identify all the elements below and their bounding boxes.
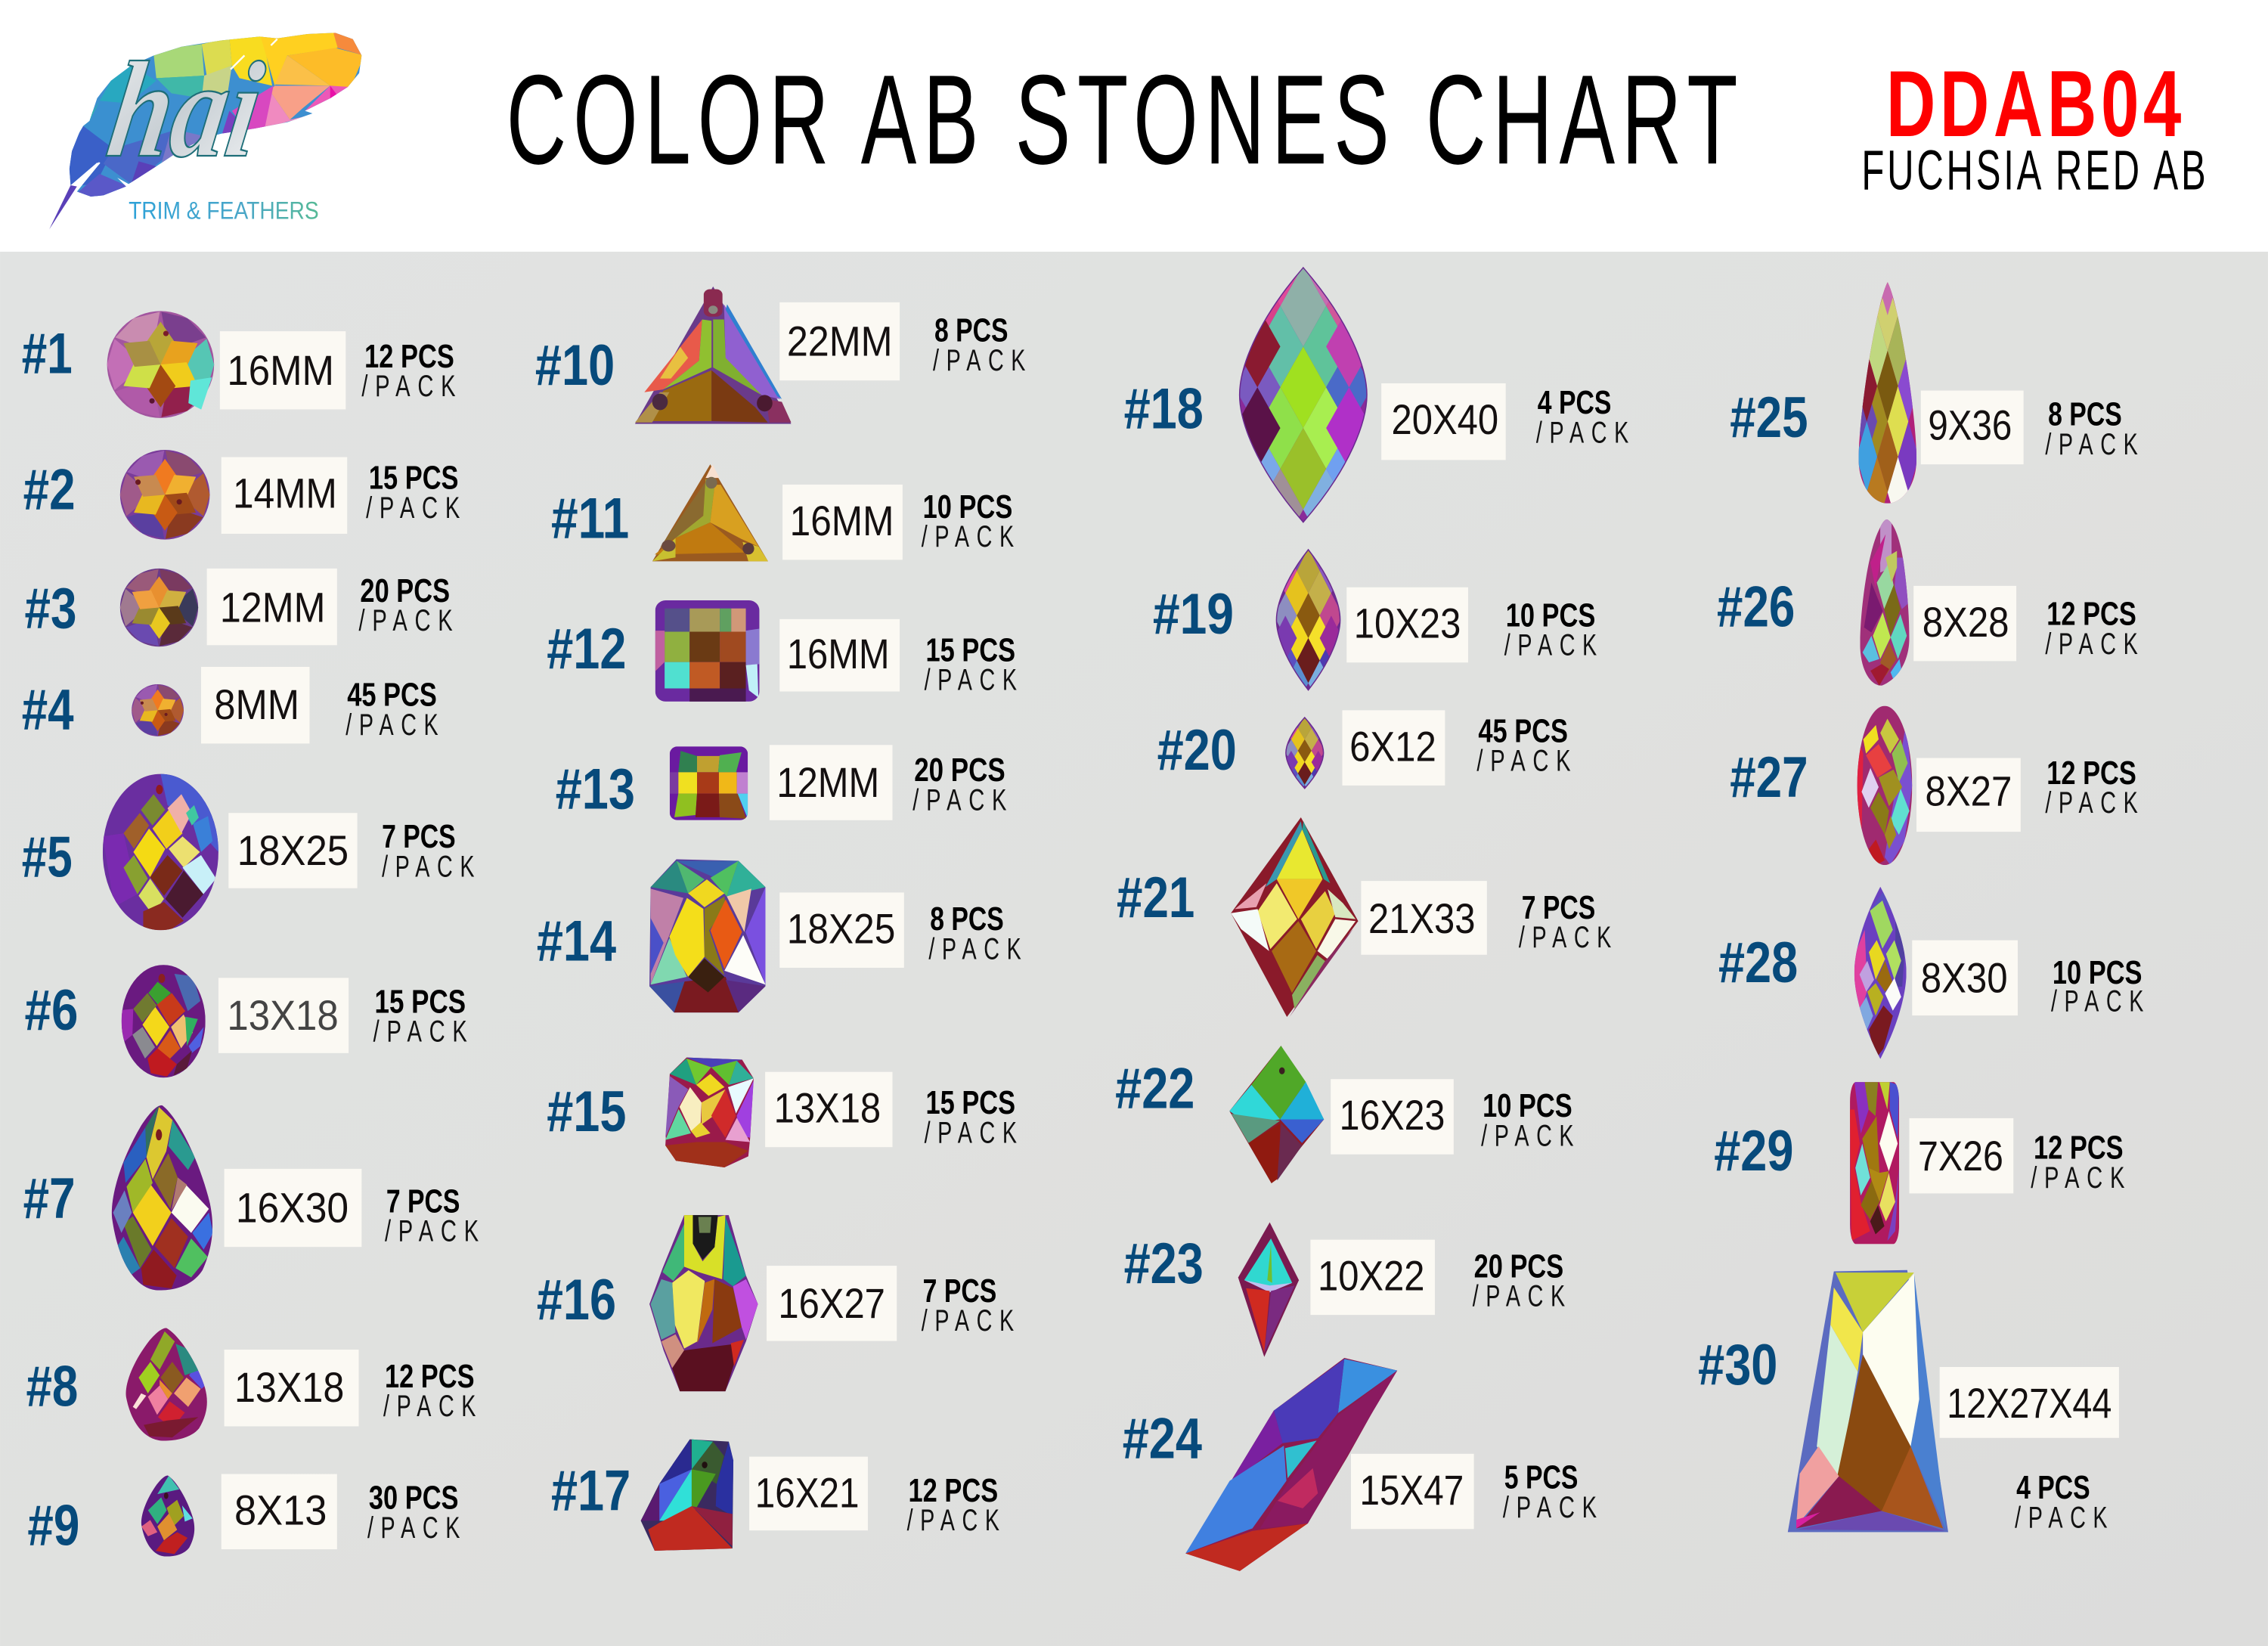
stone #13: #13 [556, 757, 635, 821]
stone #1: 16MM [227, 347, 334, 394]
stone #19: 10X23 [1354, 600, 1461, 647]
stone #19: 10 PCS [1506, 597, 1595, 634]
stone #3 [25, 564, 460, 651]
stone #12: #12 [547, 617, 626, 681]
stone #1 [22, 305, 463, 423]
stone #9: 8X13 [234, 1487, 327, 1534]
stone #23: #23 [1124, 1232, 1204, 1296]
stone #5: /PACK [382, 849, 482, 883]
stone #1: /PACK [361, 369, 463, 403]
stone #24: 15X47 [1359, 1467, 1464, 1514]
stone #15: 15 PCS [925, 1084, 1015, 1121]
stone #24 [1123, 1358, 1604, 1571]
stone #26: 8X28 [1923, 599, 2009, 646]
stone #30: #30 [1698, 1333, 1777, 1397]
stone #25: 8 PCS [2048, 395, 2122, 432]
stone #29: 12 PCS [2034, 1129, 2124, 1166]
stone #20: 45 PCS [1478, 712, 1568, 749]
stone #4: 8MM [214, 681, 299, 728]
stone #22: #22 [1115, 1057, 1194, 1121]
stone #23: /PACK [1473, 1279, 1572, 1313]
stone #25 [1730, 244, 2145, 528]
stone #23: 10X22 [1318, 1253, 1425, 1300]
stone #23 [1124, 1223, 1572, 1357]
stone #11: 16MM [790, 498, 894, 544]
stone #11: /PACK [922, 519, 1021, 553]
stone #18: #18 [1124, 377, 1204, 441]
stone #15: #15 [547, 1080, 626, 1144]
stone #30: 12X27X44 [1947, 1380, 2112, 1427]
stone #26 [1717, 519, 2145, 686]
stone #23: 20 PCS [1474, 1248, 1563, 1285]
stone #29: 7X26 [1918, 1133, 2003, 1179]
stone #21: #21 [1117, 866, 1194, 930]
stone #18 [1124, 225, 1636, 550]
stone #9: #9 [27, 1493, 79, 1558]
stone #6: 15 PCS [375, 983, 466, 1020]
stone #14: 18X25 [787, 905, 895, 952]
stone #29: /PACK [2031, 1161, 2132, 1195]
stone #21: 7 PCS [1522, 889, 1595, 926]
stone #28: /PACK [2051, 984, 2151, 1018]
stone #8: 12 PCS [385, 1358, 475, 1395]
stone #27: #27 [1730, 746, 1808, 810]
stone #25: /PACK [2045, 427, 2145, 461]
stone #12 [547, 600, 1024, 702]
stone #3: #3 [25, 576, 76, 640]
stone #17 [551, 1440, 1007, 1551]
stone #2: 14MM [233, 470, 337, 517]
stone #7: /PACK [385, 1214, 486, 1248]
stone #25: 9X36 [1928, 402, 2012, 449]
stone #24: 5 PCS [1504, 1459, 1578, 1496]
stone #27: 12 PCS [2046, 755, 2136, 792]
stone #9 [27, 1474, 467, 1558]
stone #22 [1115, 1046, 1581, 1183]
stone #20: 6X12 [1349, 723, 1436, 770]
stone #22: 16X23 [1340, 1092, 1445, 1139]
stone #9: 30 PCS [369, 1479, 459, 1516]
stone #27: /PACK [2045, 786, 2145, 820]
stone #30: 4 PCS [2016, 1469, 2090, 1506]
stone #20: #20 [1157, 718, 1237, 783]
stone #1: #1 [22, 322, 73, 386]
stone #8: #8 [26, 1355, 78, 1419]
stone #26: /PACK [2045, 627, 2145, 661]
stone #21 [1117, 817, 1619, 1017]
stone #2: /PACK [366, 491, 467, 525]
stone #29: #29 [1714, 1119, 1793, 1183]
stone #6: 13X18 [227, 992, 339, 1039]
stone #9: /PACK [367, 1511, 467, 1545]
stone #20 [1157, 705, 1578, 796]
stone #19: #19 [1153, 582, 1234, 646]
stone #19 [1153, 525, 1604, 705]
stone #10: 8 PCS [934, 312, 1009, 349]
stone #3: /PACK [359, 603, 460, 637]
stone #5: 18X25 [237, 827, 349, 874]
stone #4 [22, 667, 445, 743]
stone #16: #16 [537, 1268, 616, 1332]
stone #19: /PACK [1504, 628, 1604, 662]
stone #15 [547, 1058, 1024, 1167]
stone #28 [1718, 887, 2151, 1059]
stone #5: #5 [22, 825, 73, 889]
stone #16: /PACK [922, 1303, 1021, 1338]
stone #15: /PACK [925, 1115, 1024, 1149]
stone #17: 16X21 [755, 1470, 859, 1517]
stone #7: 7 PCS [386, 1183, 460, 1220]
stone #1: 12 PCS [364, 338, 454, 375]
stone #21: /PACK [1519, 920, 1619, 954]
stone #21: 21X33 [1368, 895, 1476, 942]
stone #30: /PACK [2015, 1500, 2115, 1534]
stone #2: #2 [23, 457, 76, 522]
stone #7: #7 [23, 1167, 76, 1231]
stone #3: 20 PCS [360, 572, 450, 609]
stone #15: 13X18 [774, 1085, 881, 1132]
stone #26: #26 [1717, 575, 1795, 639]
stone #14: 8 PCS [930, 900, 1004, 938]
stone #2 [23, 445, 467, 544]
stone #6: /PACK [373, 1015, 475, 1049]
stone #29 [1714, 1082, 2132, 1244]
stone #10: /PACK [933, 343, 1033, 377]
stone #24: #24 [1123, 1407, 1202, 1471]
stone #16: 16X27 [778, 1280, 885, 1327]
stone #20: /PACK [1476, 744, 1578, 778]
stone #4: /PACK [345, 708, 445, 742]
stone #12: 16MM [787, 631, 890, 677]
logo: hai trim and feathers: TRIM & FEATHERS [129, 196, 319, 224]
stone #16 [537, 1215, 1021, 1391]
stone #5: 7 PCS [382, 818, 456, 855]
stone #11: 10 PCS [923, 488, 1012, 525]
stone #7 [23, 1105, 486, 1291]
stone #18: 20X40 [1392, 396, 1498, 443]
logo: hai trim and feathers [49, 30, 365, 229]
stone #13: 12MM [776, 759, 879, 806]
stone #26: 12 PCS [2046, 596, 2136, 633]
stone #28: 10 PCS [2053, 954, 2143, 991]
stone #13: 20 PCS [914, 752, 1005, 789]
stone #2: 15 PCS [369, 460, 459, 497]
stone #10: 22MM [787, 318, 892, 365]
stone #11 [551, 464, 1021, 561]
stone #12: 15 PCS [925, 631, 1015, 668]
stone #18: 4 PCS [1538, 384, 1611, 421]
stone #8: /PACK [383, 1389, 483, 1423]
stone #22: /PACK [1481, 1118, 1581, 1152]
stone #27: 8X27 [1926, 768, 2012, 815]
stone #17: #17 [551, 1458, 631, 1523]
stone #25: #25 [1730, 386, 1808, 450]
stone #14: #14 [537, 909, 616, 973]
stone #18: /PACK [1536, 415, 1636, 449]
stone #16: 7 PCS [923, 1272, 996, 1310]
stone #7: 16X30 [236, 1185, 349, 1232]
stone #14 [537, 859, 1028, 1012]
stone #13: /PACK [912, 783, 1014, 817]
stone #28: 8X30 [1921, 954, 2008, 1001]
stone #11: #11 [551, 487, 629, 551]
stone #10: #10 [535, 333, 615, 398]
stone #30 [1698, 1270, 2119, 1534]
stone #8: 13X18 [234, 1364, 344, 1411]
logo: hai trim and feathers: hai [99, 33, 272, 186]
stone #5 [22, 774, 482, 930]
stone #6 [25, 965, 475, 1077]
stone #17: 12 PCS [909, 1472, 998, 1509]
stone #13 [556, 745, 1014, 821]
stone #17: /PACK [907, 1503, 1007, 1537]
stone #27 [1730, 706, 2145, 865]
stone #22: 10 PCS [1483, 1087, 1572, 1124]
stone #8 [26, 1328, 483, 1441]
stone #4: #4 [22, 677, 74, 742]
stone #14: /PACK [928, 931, 1028, 966]
stone #12: /PACK [925, 663, 1024, 697]
stone #6: #6 [25, 978, 78, 1043]
stone #4: 45 PCS [347, 677, 437, 714]
stone #28: #28 [1718, 931, 1798, 995]
stone #24: /PACK [1503, 1490, 1604, 1524]
stone #3: 12MM [220, 584, 326, 631]
stone #10 [535, 287, 1033, 424]
